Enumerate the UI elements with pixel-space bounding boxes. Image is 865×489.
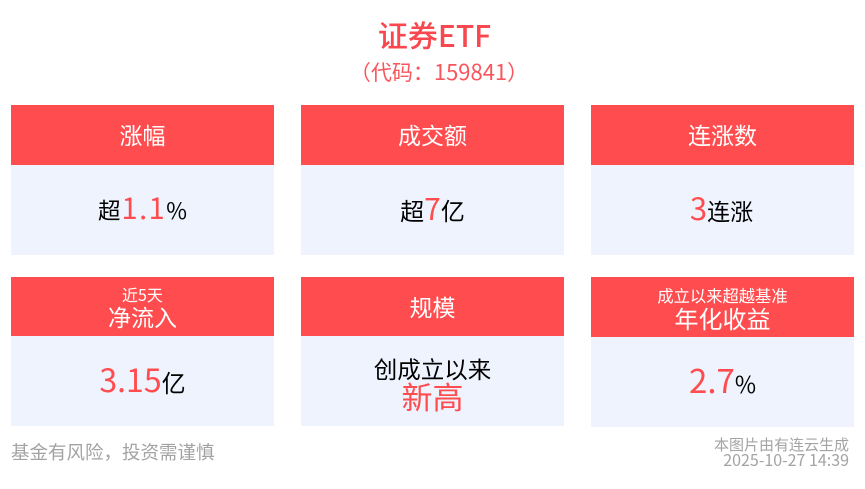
panel: 规模 [301,277,564,426]
header: 成立以来超越基准年化收益: 年化收益 [674,300,770,335]
header: 规模: 规模 [410,289,456,323]
header: 近5天净流入: 净流入 [108,299,177,333]
value: 3连涨: 3连涨 [690,184,753,229]
title: 证券ETF [378,12,491,56]
value: 创成立以来新高: 创成立以来 [374,351,491,385]
header: 成立以来超越基准年化收益: 成立以来超越基准 [657,283,788,307]
subtitle: fund code: （代码：159841） [350,55,528,87]
value: 超1.1%: 超1.1% [98,186,187,228]
panel: 年化收益 [591,277,854,427]
source and timestamp [714,434,849,471]
header: 连涨数: 连涨数 [688,117,757,151]
header: 成交额: 成交额 [398,117,467,151]
header: 涨幅 [11,105,274,165]
panel: 涨幅 [11,105,274,255]
header: 规模 [301,277,564,336]
header: 连涨数 [591,105,854,165]
panel: 连涨数 [591,105,854,255]
value: 超7亿 [301,165,564,255]
source and timestamp: 2025-10-27 14:39 [723,447,849,471]
header: 近5天净流入 [11,277,274,336]
header: 成立以来超越基准年化收益 [591,277,854,337]
value: 3连涨 [591,165,854,255]
header: 涨幅: 涨幅 [120,117,166,151]
value: 2.7%: 2.7% [689,355,756,403]
value: 超7亿: 超7亿 [400,185,465,229]
panel: 净流入 [11,277,274,426]
value: 超1.1% [11,165,274,255]
disclaimer: 基金有风险，投资需谨慎 [11,439,215,465]
value: 2.7% [591,337,854,427]
source and timestamp: 本图片由有连云生成 [714,434,849,455]
panel: 成交额 [301,105,564,255]
header: 近5天净流入: 近5天 [122,282,163,306]
value: 创成立以来新高 [301,336,564,426]
value: 3.15亿: 3.15亿 [99,356,186,402]
value: 3.15亿 [11,336,274,426]
header: 成交额 [301,105,564,165]
value: 创成立以来新高: 新高 [402,373,464,418]
